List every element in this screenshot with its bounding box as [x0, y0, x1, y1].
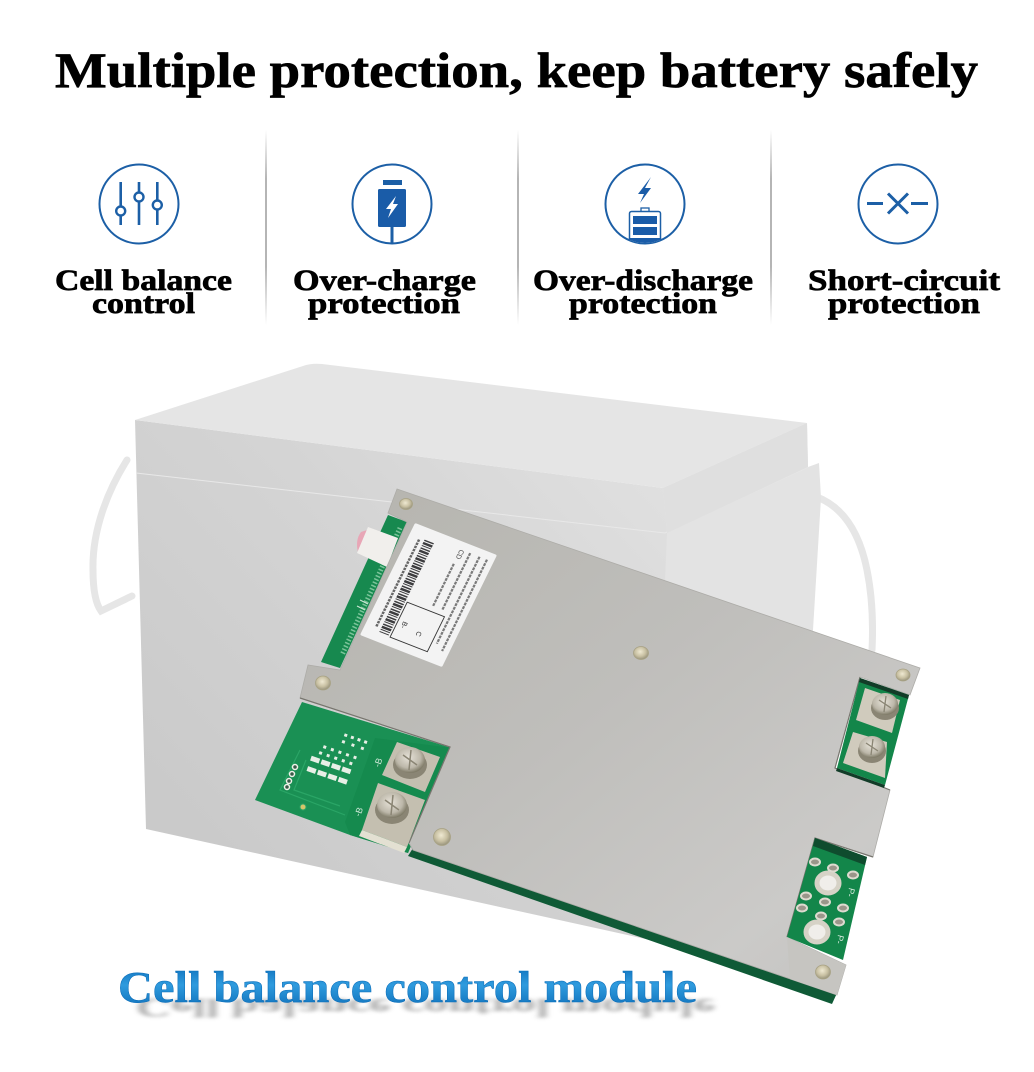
icon: bolt and battery [606, 164, 684, 246]
small vias [797, 858, 858, 926]
left lower battery terminal [353, 783, 425, 853]
battery front [135, 420, 667, 940]
plate screws [316, 498, 910, 979]
caption reflection: Cell balance control module [136, 993, 715, 1022]
right upper terminals PCB [837, 678, 909, 785]
product sticker: CD [454, 548, 465, 560]
power pads PCB: P- [845, 887, 857, 898]
battery handles [93, 460, 872, 650]
bottom right plate tab [787, 937, 846, 995]
label: over-charge protection [293, 264, 476, 320]
feature: over-charge protection [293, 164, 476, 320]
icon: sliders [100, 164, 178, 244]
column dividers [265, 130, 772, 325]
right upper terminal [856, 688, 900, 733]
feature: cell balance control [55, 164, 232, 320]
product sticker: B- [398, 620, 408, 630]
label: over-charge protection: Over-charge [293, 264, 476, 297]
product sticker [360, 523, 497, 667]
left lower battery terminal: -B [353, 806, 365, 818]
feature: over-discharge protection [533, 164, 753, 320]
label: over-discharge protection [533, 264, 753, 320]
label: short-circuit protection [808, 264, 1000, 320]
plate edge shadows [300, 677, 890, 937]
label: over-discharge protection: protection [569, 287, 717, 320]
large mounting pads [806, 873, 839, 942]
silk labels: -B [372, 757, 384, 768]
label: cell balance control [55, 264, 232, 320]
label: over-discharge protection: Over-discharge [533, 264, 753, 297]
icon: broken circuit [858, 164, 938, 244]
green PCB under bottom edge [408, 848, 837, 1004]
product sticker: C [414, 630, 422, 637]
power pads PCB [787, 838, 867, 960]
label: short-circuit protection: Short-circuit [808, 264, 1000, 297]
label: over-charge protection: protection [308, 287, 460, 320]
signal connector strip [321, 515, 407, 668]
barcode [384, 541, 429, 634]
battery management board [255, 489, 920, 1004]
title: Multiple protection, keep battery safely [55, 42, 978, 98]
faded battery illustration [93, 364, 872, 940]
label: short-circuit protection: protection [828, 287, 980, 320]
label: cell balance control: Cell balance [55, 264, 232, 297]
label: cell balance control: control [92, 287, 195, 320]
battery right side [640, 423, 821, 820]
icon: charging battery [352, 164, 432, 244]
wiring diagram [390, 602, 444, 652]
left upper battery terminal [382, 742, 440, 792]
aluminium cover plate [300, 489, 920, 995]
battery lid top [135, 364, 807, 488]
spec lines [416, 549, 487, 651]
white connector plug [357, 527, 398, 567]
lower left PCB [255, 702, 452, 853]
right lower terminal [843, 732, 887, 778]
feature: short-circuit protection [808, 164, 1000, 320]
white component pads [306, 726, 368, 787]
through holes [284, 764, 298, 790]
caption: Cell balance control module [118, 963, 697, 1012]
power pads PCB: P- [834, 934, 846, 945]
